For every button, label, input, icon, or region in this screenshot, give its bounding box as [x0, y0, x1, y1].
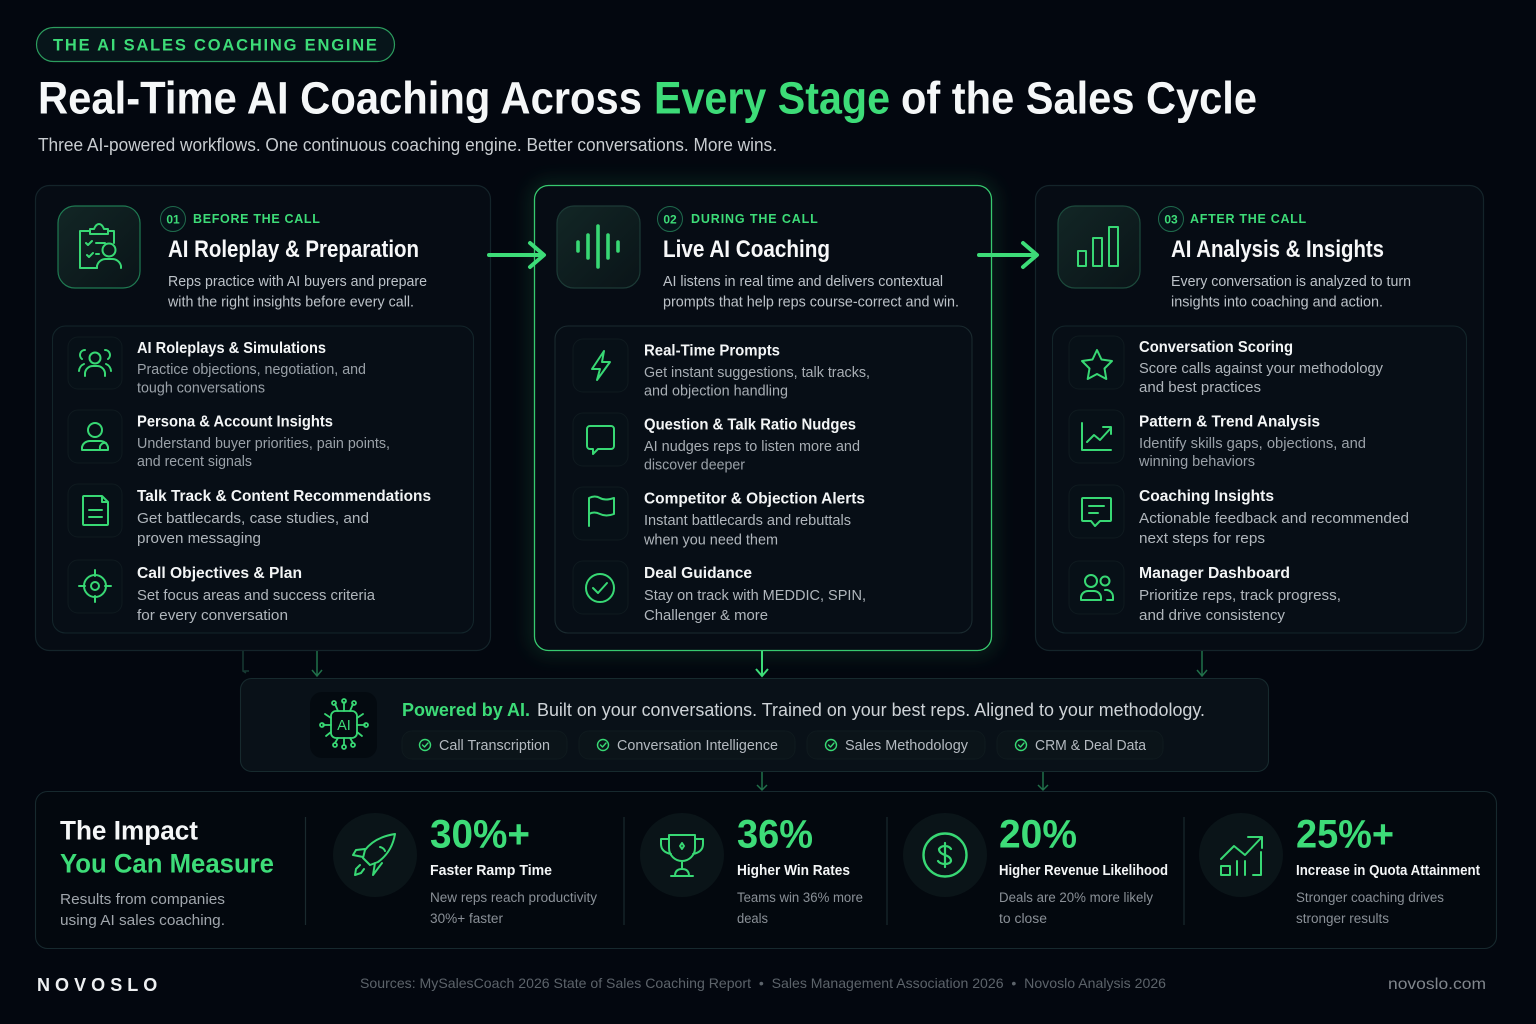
step label: [160, 206, 321, 232]
step label: 02: [663, 212, 677, 226]
eyebrow pill: [36, 28, 394, 62]
item: prompts: Get instant suggestions, talk tracks,: [644, 365, 870, 381]
metric: ramp time: [333, 812, 597, 926]
panel description: with the right insights before every call.: [167, 294, 414, 310]
item: objectives: Call Objectives & Plan: [137, 565, 302, 582]
panel description: insights into coaching and action.: [1171, 294, 1383, 310]
item: objectives: [68, 560, 376, 624]
platform statement: Built on your conversations. Trained on your best reps. Aligned to your methodology.: [537, 700, 1205, 720]
item: trends: winning behaviors: [1138, 454, 1255, 470]
impact heading: The Impact: [60, 816, 198, 846]
item: objectives: Set focus areas and success criteria: [137, 588, 376, 604]
step label: [658, 206, 819, 232]
impact note: using AI sales coaching.: [60, 912, 225, 929]
chip: sales methodology: Sales Methodology: [845, 738, 969, 754]
metric: win rates: deals: [737, 911, 768, 926]
item: trends: Identify skills gaps, objections, and: [1139, 436, 1366, 452]
item: prompts: Real-Time Prompts: [644, 342, 780, 360]
item: prompts: and objection handling: [644, 384, 788, 400]
arrow: before to during: [489, 243, 544, 267]
item: deal guidance: Deal Guidance: [644, 565, 752, 582]
item: roleplays: [68, 337, 366, 396]
panel description: [1171, 274, 1411, 310]
item: trends: [1069, 410, 1366, 470]
metric: ramp time: 30%+ faster: [430, 911, 504, 926]
item: persona: Understand buyer priorities, pain points,: [137, 436, 390, 452]
panel description: [167, 274, 427, 310]
icon: sound wave: [557, 206, 640, 288]
step label: AFTER THE CALL: [1190, 212, 1307, 226]
item: coaching insights: [1069, 485, 1409, 547]
metric: revenue: Deals are 20% more likely: [999, 890, 1153, 905]
item: deal guidance: [573, 561, 866, 624]
metric: quota: Increase in Quota Attainment: [1296, 863, 1480, 879]
panel: after the call: [1036, 186, 1484, 650]
item: persona: Persona & Account Insights: [137, 414, 333, 430]
item: scoring: and best practices: [1139, 380, 1261, 396]
item: scoring: Score calls against your methodology: [1139, 361, 1384, 377]
icon: AI chip: [310, 692, 377, 758]
step label: [1158, 206, 1307, 232]
item: coaching insights: next steps for reps: [1139, 531, 1265, 547]
feature list: [1052, 326, 1466, 633]
panel heading: Live AI Coaching: [663, 236, 830, 263]
eyebrow pill: THE AI SALES COACHING ENGINE: [53, 36, 379, 54]
title: Every Stage: [654, 72, 890, 124]
platform bar: powered by AI: [240, 678, 1268, 772]
panel heading: AI Roleplay & Preparation: [168, 236, 419, 263]
panel description: prompts that help reps course-correct and win.: [663, 294, 959, 310]
step label: 03: [1164, 212, 1178, 226]
item: talk track: Talk Track & Content Recommendations: [137, 488, 431, 505]
item: roleplays: AI Roleplays & Simulations: [137, 340, 326, 357]
step label: DURING THE CALL: [691, 212, 819, 226]
chip: conversation intelligence: Conversation Intelligence: [617, 738, 778, 754]
footer url: novoslo.com: [1388, 976, 1486, 993]
impact heading: [60, 816, 274, 878]
metric: quota: stronger results: [1296, 911, 1389, 926]
item: talk track: proven messaging: [137, 531, 261, 547]
panel description: AI listens in real time and delivers contextual: [663, 274, 943, 290]
item: dashboard: [1069, 561, 1341, 624]
footer logo: NOVOSLO: [37, 975, 162, 995]
chip: conversation intelligence: [579, 731, 795, 759]
title: of the Sales Cycle: [901, 72, 1257, 124]
item: persona: and recent signals: [137, 454, 252, 470]
metric: revenue: Higher Revenue Likelihood: [999, 863, 1168, 879]
item: coaching insights: Coaching Insights: [1139, 488, 1274, 505]
title: [38, 72, 1257, 124]
impact heading: You Can Measure: [60, 848, 274, 878]
metric: ramp time: New reps reach productivity: [430, 890, 597, 905]
metric: ramp time: Faster Ramp Time: [430, 863, 552, 879]
item: alerts: [573, 487, 865, 548]
step label: BEFORE THE CALL: [193, 212, 321, 226]
feature list: [555, 326, 972, 633]
item: alerts: Instant battlecards and rebuttals: [644, 513, 851, 529]
metric: win rates: Teams win 36% more: [737, 890, 863, 905]
metric: quota: Stronger coaching drives: [1296, 890, 1444, 905]
item: roleplays: Practice objections, negotiation, and: [137, 362, 366, 378]
panel description: Reps practice with AI buyers and prepare: [168, 274, 427, 290]
item: nudges: [573, 413, 860, 474]
impact note: Results from companies: [60, 891, 225, 908]
icon: bar chart: [1058, 206, 1140, 288]
item: objectives: for every conversation: [137, 608, 288, 624]
footer sources: Sources: MySalesCoach 2026 State of Sales Coaching Report • Sales Management Association 2026 • Novoslo Analysis 2026: [360, 975, 1166, 991]
subtitle: Three AI-powered workflows. One continuous coaching engine. Better conversations. More wins.: [38, 135, 777, 155]
item: scoring: Conversation Scoring: [1139, 339, 1293, 356]
item: dashboard: Manager Dashboard: [1139, 565, 1290, 582]
panel description: [663, 274, 959, 310]
panel description: Every conversation is analyzed to turn: [1171, 274, 1411, 290]
metric: revenue: [903, 812, 1168, 926]
item: talk track: Get battlecards, case studies, and: [137, 511, 369, 527]
item: nudges: AI nudges reps to listen more and: [644, 439, 860, 455]
item: deal guidance: Stay on track with MEDDIC, SPIN,: [644, 588, 866, 604]
panel: during the call: [534, 186, 992, 650]
item: trends: Pattern & Trend Analysis: [1139, 414, 1320, 430]
step label: 01: [166, 212, 180, 226]
platform statement: Powered by AI.: [402, 700, 530, 720]
metric: win rates: [640, 812, 863, 926]
item: alerts: when you need them: [643, 532, 778, 548]
title: Real-Time AI Coaching Across: [38, 72, 642, 124]
feature list: [52, 326, 474, 633]
panel: impact: [36, 792, 1496, 948]
item: roleplays: tough conversations: [137, 380, 265, 396]
chip: sales methodology: [807, 731, 985, 759]
connector arrows to impact panel: [757, 772, 1048, 790]
metric: revenue: 20%: [999, 812, 1077, 856]
item: nudges: Question & Talk Ratio Nudges: [644, 416, 856, 434]
chip: CRM and deal data: CRM & Deal Data: [1035, 738, 1147, 754]
item: persona: [68, 410, 390, 470]
metric: win rates: 36%: [737, 812, 813, 856]
icon: clipboard with person: [58, 206, 140, 288]
item: dashboard: Prioritize reps, track progress,: [1139, 588, 1341, 604]
panel: before the call: [36, 186, 490, 650]
impact note: [60, 891, 225, 929]
metric: revenue: to close: [999, 911, 1047, 926]
item: talk track: [68, 484, 431, 547]
item: coaching insights: Actionable feedback and recommended: [1139, 511, 1409, 527]
item: prompts: [573, 339, 870, 400]
connector arrows to platform bar: [243, 651, 1207, 676]
icon: AI chip: AI: [337, 718, 351, 734]
chip: CRM and deal data: [997, 731, 1163, 759]
item: scoring: [1069, 336, 1384, 396]
metric: ramp time: 30%+: [430, 812, 530, 856]
metric: quota: [1199, 812, 1480, 926]
arrow: during to after: [979, 243, 1037, 267]
metric: quota: 25%+: [1296, 812, 1394, 856]
item: nudges: discover deeper: [644, 458, 745, 474]
panel heading: AI Analysis & Insights: [1171, 236, 1384, 263]
item: alerts: Competitor & Objection Alerts: [644, 490, 865, 508]
metric: win rates: Higher Win Rates: [737, 863, 850, 879]
chip: call transcription: [402, 731, 567, 759]
item: deal guidance: Challenger & more: [644, 608, 768, 624]
chip: call transcription: Call Transcription: [439, 738, 550, 754]
item: dashboard: and drive consistency: [1139, 608, 1286, 624]
